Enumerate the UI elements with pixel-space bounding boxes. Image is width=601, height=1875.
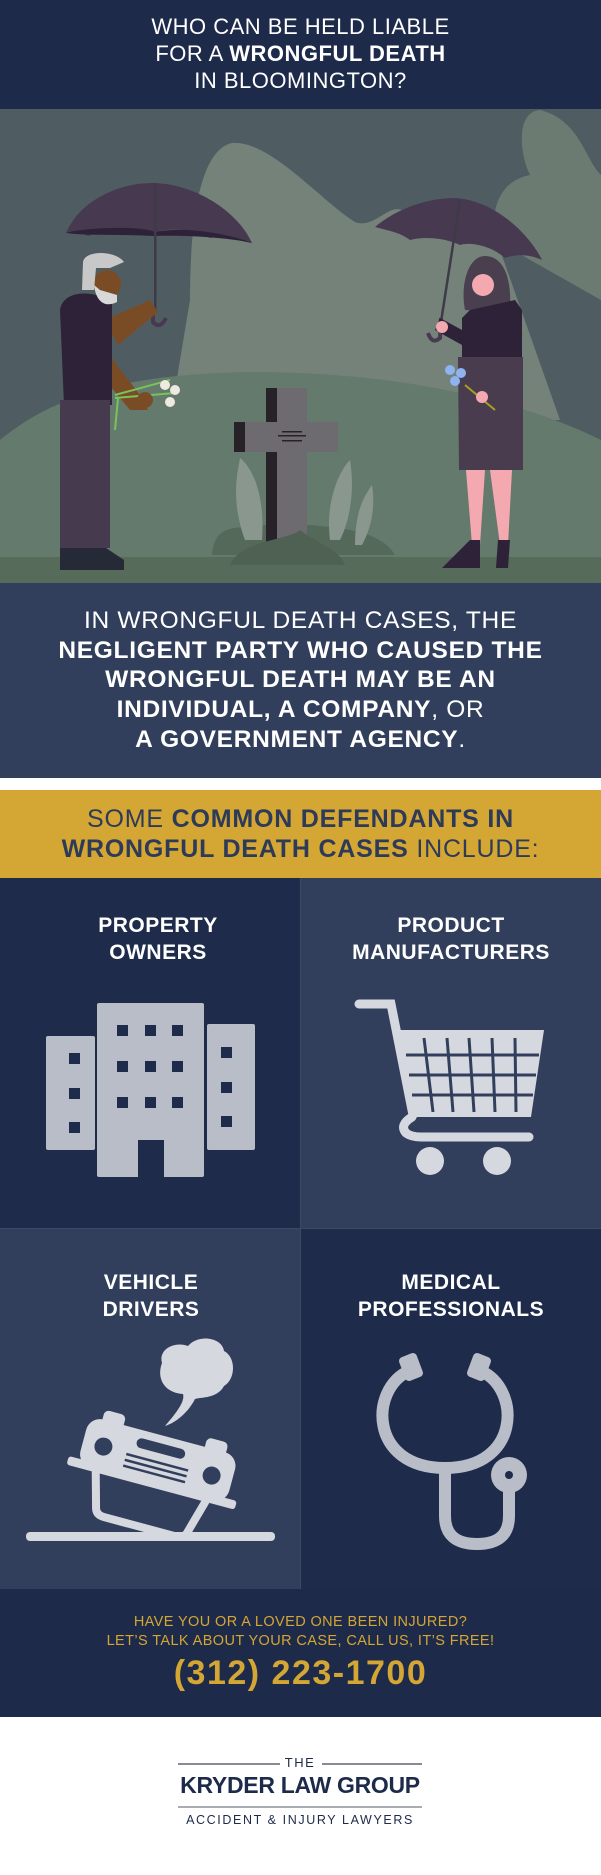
icon: stethoscope (376, 1353, 527, 1550)
icon: buildings (46, 1003, 255, 1177)
logo (178, 1755, 422, 1827)
intro statement (58, 607, 543, 753)
icon: overturned car (26, 1338, 275, 1541)
heading: VEHICLE (104, 1271, 198, 1294)
intro text panel (0, 583, 601, 778)
illustration: mourners at grave (0, 109, 601, 583)
logo: THE (285, 1755, 315, 1770)
title: FOR A WRONGFUL DEATH (155, 41, 446, 66)
cross (212, 388, 395, 565)
banner heading (62, 805, 539, 863)
call to action (0, 1589, 601, 1717)
cta text: HAVE YOU OR A LOVED ONE BEEN INJURED? (134, 1614, 467, 1630)
gold banner (0, 790, 601, 878)
panel: medical professionals (300, 1228, 601, 1589)
heading (103, 1271, 199, 1321)
intro statement: INDIVIDUAL, A COMPANY, OR (117, 696, 484, 723)
intro statement: NEGLIGENT PARTY WHO CAUSED THE (58, 637, 543, 664)
intro statement: WRONGFUL DEATH MAY BE AN (105, 666, 496, 693)
heading (352, 914, 550, 964)
title: WHO CAN BE HELD LIABLE (151, 14, 450, 39)
title (151, 14, 450, 93)
logo: KRYDER LAW GROUP (180, 1772, 420, 1798)
header (0, 0, 601, 109)
panel: property owners (0, 878, 300, 1228)
woman with umbrella (375, 198, 542, 568)
cta text: LET’S TALK ABOUT YOUR CASE, CALL US, IT’S FREE! (107, 1633, 494, 1649)
banner heading: WRONGFUL DEATH CASES INCLUDE: (62, 835, 539, 863)
intro statement: IN WRONGFUL DEATH CASES, THE (84, 607, 517, 634)
icon: shopping cart (354, 1000, 544, 1175)
heading: PROFESSIONALS (358, 1298, 544, 1321)
heading: PROPERTY (98, 914, 218, 937)
title: IN BLOOMINGTON? (194, 68, 407, 93)
man with umbrella (60, 183, 252, 570)
heading: PRODUCT (397, 914, 505, 937)
intro statement: A GOVERNMENT AGENCY. (135, 726, 466, 753)
heading: OWNERS (109, 941, 207, 964)
heading: DRIVERS (103, 1298, 199, 1321)
heading (358, 1271, 544, 1321)
heading: MEDICAL (401, 1271, 501, 1294)
heading: MANUFACTURERS (352, 941, 550, 964)
heading (98, 914, 218, 964)
logo: ACCIDENT & INJURY LAWYERS (186, 1813, 414, 1827)
phone number: (312) 223-1700 (174, 1654, 427, 1692)
panel: product manufacturers (300, 878, 601, 1228)
banner heading: SOME COMMON DEFENDANTS IN (87, 805, 514, 833)
cta text (107, 1614, 494, 1649)
panel: vehicle drivers (0, 1228, 300, 1589)
